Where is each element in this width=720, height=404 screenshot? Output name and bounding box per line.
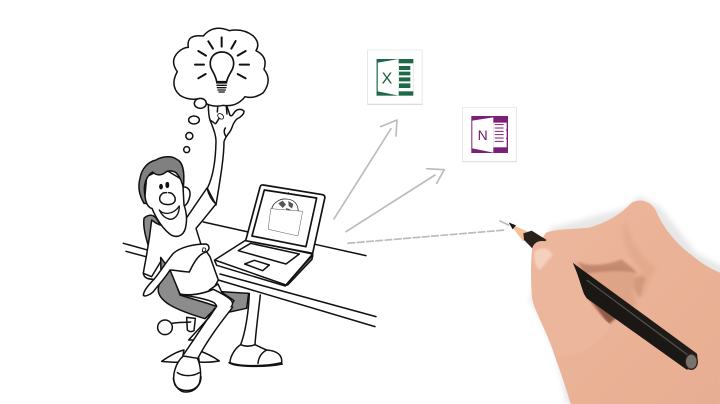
OneNote logo: N bbox=[478, 127, 488, 143]
hair bbox=[139, 157, 184, 203]
light rays bbox=[195, 37, 249, 78]
chair stem and knob bbox=[187, 317, 195, 332]
hand shadow bbox=[530, 197, 720, 404]
Excel logo: X bbox=[382, 70, 393, 87]
office chair base bbox=[162, 350, 219, 362]
raised knee thigh bbox=[180, 289, 233, 340]
arrow: to OneNote bbox=[346, 169, 444, 232]
icon: Excel card bbox=[368, 50, 422, 104]
eyes bbox=[160, 185, 162, 189]
face bbox=[145, 168, 187, 236]
man seated: D bbox=[202, 247, 207, 254]
lower legs and sandals bbox=[173, 307, 282, 392]
laptop screen bbox=[246, 185, 325, 253]
pencil tip bbox=[509, 223, 530, 242]
man seated bbox=[143, 188, 249, 340]
nose bbox=[160, 193, 175, 205]
thought bubbles bbox=[184, 98, 206, 153]
arrow: to Excel bbox=[334, 120, 397, 219]
chair back bbox=[144, 215, 167, 252]
thought cloud with light bulb bbox=[174, 28, 268, 106]
chair seat bbox=[158, 269, 217, 319]
shorts bbox=[209, 284, 222, 296]
finger shading bbox=[573, 223, 657, 324]
arm across body bbox=[143, 244, 209, 296]
torso bbox=[143, 188, 218, 295]
folder with globe bbox=[268, 199, 303, 236]
back of hand and fingers bbox=[532, 200, 720, 404]
icon: OneNote card bbox=[463, 107, 516, 161]
head bbox=[139, 157, 190, 236]
light bulb bbox=[210, 52, 234, 92]
arrow: being drawn bbox=[347, 221, 509, 243]
laptop base bbox=[215, 240, 313, 285]
hand holding pencil bbox=[509, 197, 720, 404]
desk bbox=[123, 222, 376, 345]
thumb bbox=[531, 241, 611, 357]
smile bbox=[159, 206, 179, 219]
cloud outline bbox=[174, 28, 268, 106]
laptop bbox=[215, 185, 325, 286]
pencil body bbox=[523, 231, 547, 249]
ears bbox=[183, 187, 190, 207]
raised arm and hand bbox=[207, 103, 244, 205]
